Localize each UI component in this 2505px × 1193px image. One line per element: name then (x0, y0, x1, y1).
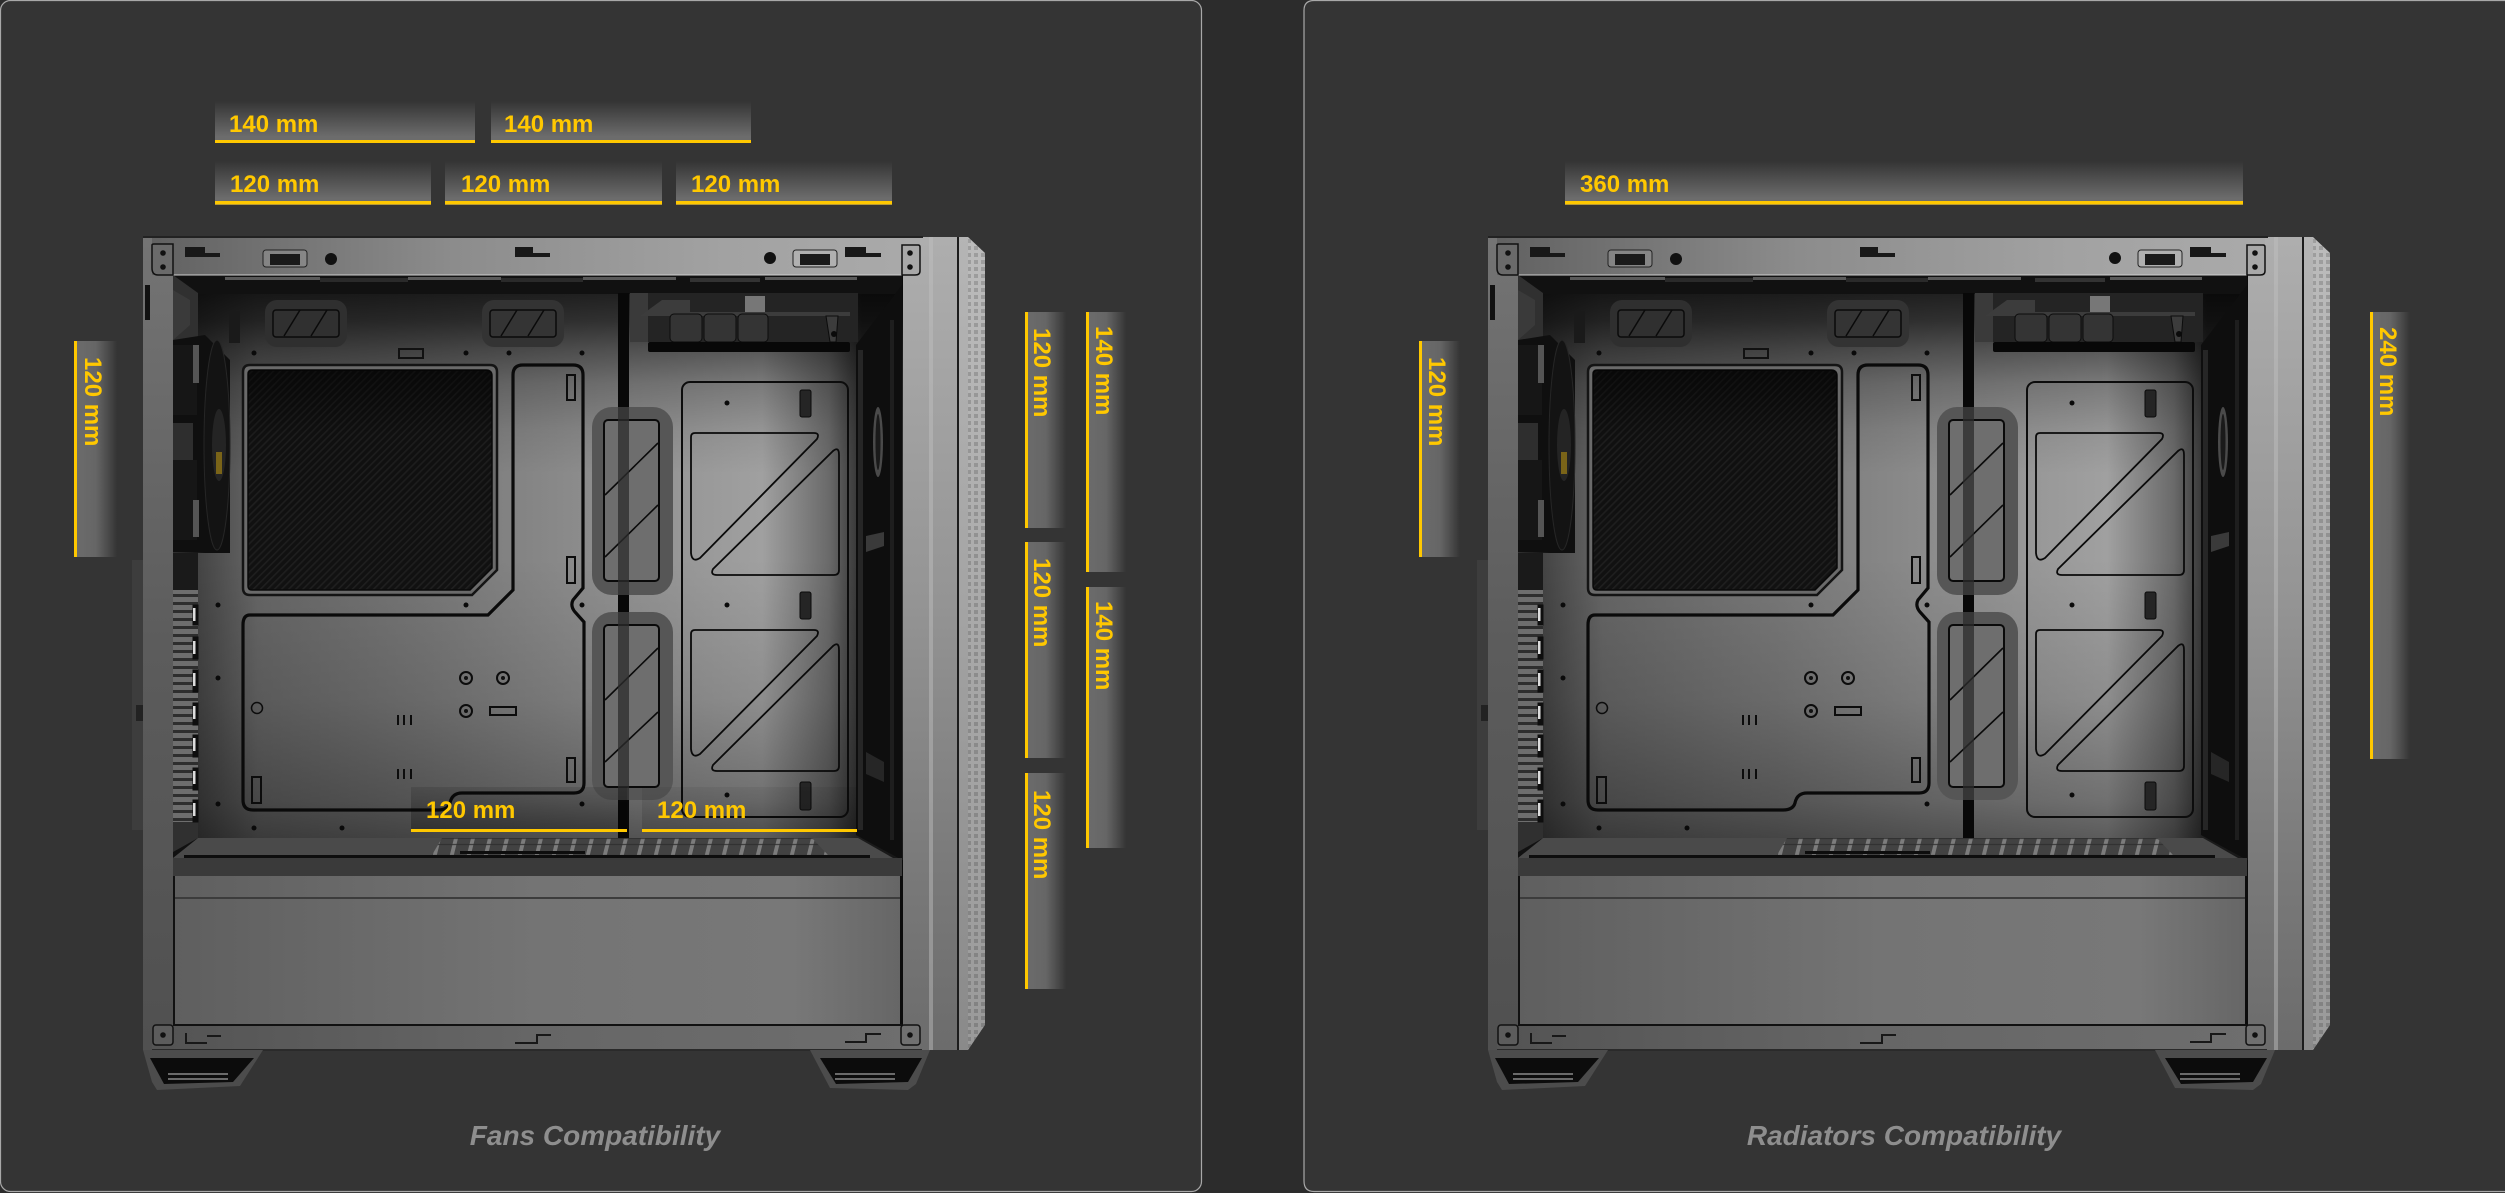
label: front 120 mm lower (1025, 773, 1066, 989)
label: rear 120 mm radiator: 120 mm (1423, 357, 1450, 446)
right pillar (900, 237, 968, 1050)
top corner brackets (152, 244, 920, 275)
label: top 120 mm middle (445, 161, 662, 205)
label: front 240 mm: 240 mm (2374, 327, 2401, 416)
label: front 140 mm lower: 140 mm (1090, 601, 1117, 690)
left pillar (136, 237, 173, 1050)
right cable panel (682, 382, 848, 817)
label: top 140 mm right (491, 101, 751, 143)
label: front 140 mm upper (1086, 312, 1126, 572)
caption: radiators: Radiators Compatibility (1747, 1120, 2063, 1151)
cable bar (618, 293, 629, 840)
label: front 140 mm upper: 140 mm (1090, 326, 1117, 415)
top bar cutouts (185, 247, 881, 267)
panel background: fans (0, 0, 1202, 1192)
label: front 140 mm lower (1086, 587, 1126, 848)
label: bottom 120 mm left: 120 mm (426, 797, 515, 824)
tray slots and standoffs (252, 375, 575, 803)
back wall (173, 275, 903, 860)
panel triangles (691, 433, 839, 771)
label: top 140 mm right: 140 mm (504, 111, 593, 138)
case floor (173, 838, 893, 858)
PC case illustration copy (1477, 236, 2330, 1090)
small bracket tab (399, 349, 423, 358)
label: top 140 mm left (215, 101, 475, 143)
label: top 120 mm left: 120 mm (230, 171, 319, 198)
caption: fans: Fans Compatibility (470, 1120, 722, 1151)
CPU cutout with mesh (243, 365, 497, 595)
case foot right (810, 1050, 930, 1090)
rear exhaust fan (173, 335, 230, 553)
label: top 360 mm (1565, 161, 2243, 205)
front intake fans (856, 285, 902, 860)
left outer bump (132, 560, 146, 830)
label: front 120 mm upper: 120 mm (1028, 328, 1055, 417)
label: front 240 mm (2370, 312, 2410, 759)
ceiling rails (225, 277, 857, 282)
motherboard tray outline (243, 365, 584, 810)
drive bay (630, 293, 858, 352)
ceiling shadow (173, 275, 902, 294)
panel: radiators compatibility (1304, 0, 2505, 1192)
label: front 120 mm middle: 120 mm (1028, 558, 1055, 647)
shroud (173, 858, 902, 1026)
label: front 120 mm middle (1025, 542, 1066, 758)
label: top 120 mm right: 120 mm (691, 171, 780, 198)
rubber grommet lower (592, 612, 673, 800)
label: bottom 120 mm right: 120 mm (657, 797, 746, 824)
case foot left (143, 1050, 263, 1090)
upper cable cutouts (265, 300, 564, 347)
rubber grommet upper (592, 407, 673, 595)
label: bottom 120 mm right (642, 787, 857, 832)
label: bottom 120 mm left (411, 787, 627, 832)
front mesh panel (968, 237, 985, 1050)
standoff centres (464, 676, 505, 713)
label: top 360 mm: 360 mm (1580, 171, 1669, 198)
bottom corner brackets (153, 1025, 920, 1045)
label: top 120 mm middle: 120 mm (461, 171, 550, 198)
PC case illustration (132, 236, 985, 1090)
label: rear 120 mm (74, 341, 117, 557)
label: top 120 mm right (676, 161, 892, 205)
top bar (143, 236, 923, 276)
panel: fans compatibility (0, 0, 1202, 1192)
left inner wall with expansion slots (173, 275, 198, 860)
mounting dots (216, 350, 730, 830)
label: top 120 mm left (215, 161, 431, 205)
label: top 140 mm left: 140 mm (229, 111, 318, 138)
rear switch (229, 311, 240, 343)
label: front 120 mm upper (1025, 312, 1066, 528)
panel background: radiators (1304, 0, 2505, 1192)
bottom bar (152, 1024, 922, 1051)
panel slots (800, 390, 811, 810)
label: front 120 mm lower: 120 mm (1028, 790, 1055, 879)
label: rear 120 mm radiator (1419, 341, 1460, 557)
label: rear 120 mm: 120 mm (79, 357, 106, 446)
